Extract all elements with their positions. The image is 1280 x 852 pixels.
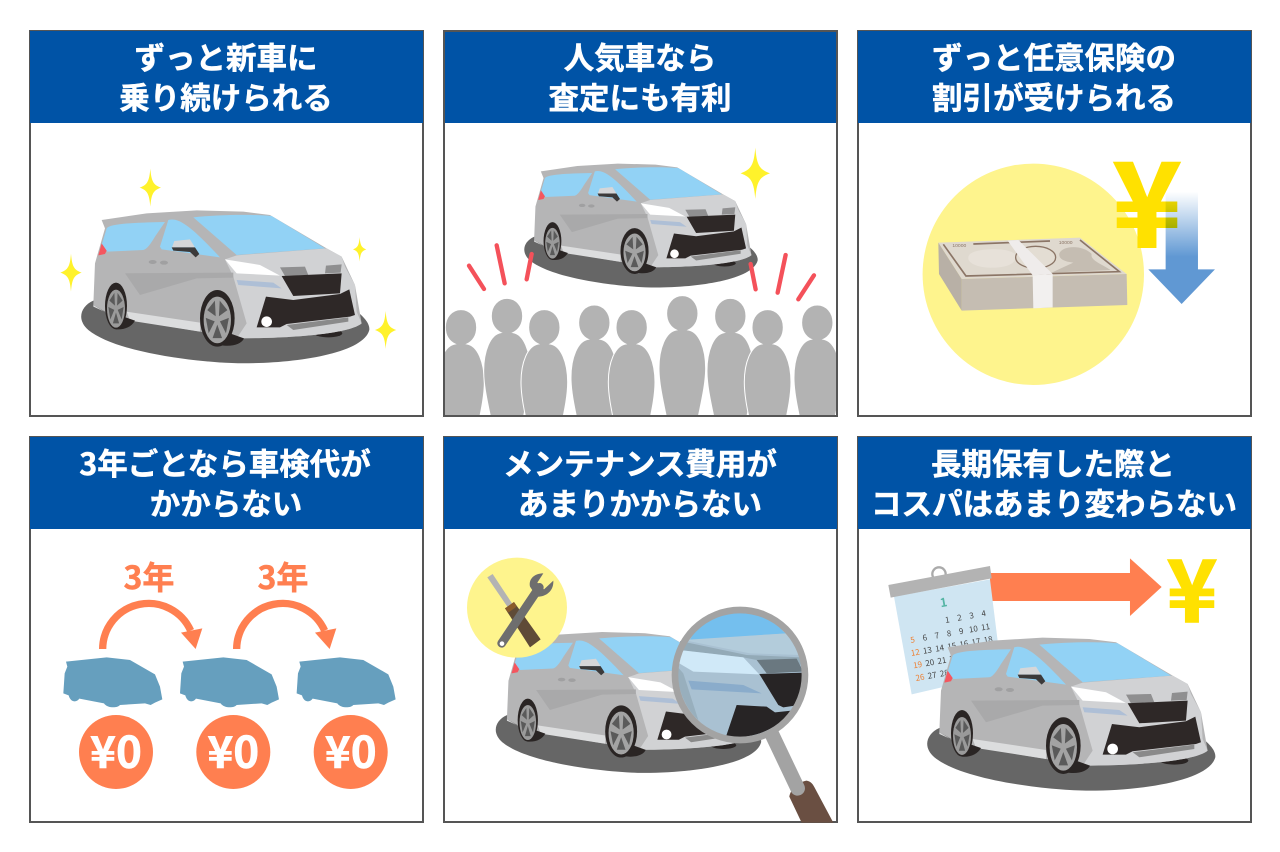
icon: calendar: 15 <box>946 640 957 653</box>
label: 3 years: 3年 <box>124 553 174 599</box>
icon: stack of banknotes <box>938 238 1127 311</box>
icon: calendar <box>888 566 1002 694</box>
badge: zero yen: ¥0 <box>207 717 259 781</box>
panel: insurance discount <box>858 31 1251 416</box>
icon: calendar: 28 <box>939 667 950 680</box>
icon: calendar: 2 <box>956 612 963 624</box>
icon: calendar: 21 <box>937 655 947 667</box>
icon: sparkles <box>60 169 396 349</box>
icon: calendar: 16 <box>959 638 970 650</box>
heading: long-term value: コスパはあまり変わらない <box>871 480 1237 524</box>
arrow: first cycle <box>103 603 202 649</box>
icon: calendar: 19 <box>912 659 923 671</box>
heading: maintenance cost: あまりかからない <box>518 480 762 524</box>
heading: no inspection cost: 3年ごとなら車検代が <box>79 440 371 484</box>
icon: calendar: 27 <box>927 669 938 682</box>
heading: insurance discount: 割引が受けられる <box>932 74 1176 118</box>
heading: insurance discount: ずっと任意保険の <box>932 34 1176 78</box>
panel: popular car <box>438 31 843 436</box>
arrow: falling cost <box>1148 192 1215 304</box>
icon: calendar: 1 <box>944 614 950 626</box>
badge: zero yen: ¥0 <box>325 717 377 781</box>
arrow: second cycle <box>237 603 336 649</box>
icon: calendar: 11 <box>980 621 991 633</box>
icon: calendar: 3 <box>969 610 975 622</box>
illustration: car on display <box>524 164 758 288</box>
background circle <box>923 164 1144 385</box>
icon: calendar: 17 <box>971 636 982 648</box>
icon: calendar: 18 <box>983 634 994 646</box>
arrow: value over time <box>990 558 1162 616</box>
heading: long-term value: 長期保有した際と <box>931 440 1175 484</box>
icon: yen sign: ¥ <box>1167 522 1217 647</box>
icon: calendar: 5 <box>910 634 916 646</box>
panel: new car <box>30 31 423 416</box>
heading: new car: 乗り続けられる <box>119 74 333 118</box>
icon: calendar: 9 <box>958 626 964 637</box>
heading: no inspection cost: かからない <box>150 480 302 524</box>
icon: calendar: 7 <box>934 630 941 642</box>
icon: stack of banknotes: 10000 <box>952 243 966 249</box>
panel: maintenance cost <box>444 437 837 823</box>
badge: zero yen: ¥0 <box>90 717 142 781</box>
heading: popular car: 人気車なら <box>564 34 716 78</box>
label: 3 years: 3年 <box>258 553 308 599</box>
icon: calendar: 10 <box>968 623 979 636</box>
icon: calendar: 14 <box>934 642 946 655</box>
icon: calendar: 1 <box>939 593 949 611</box>
emphasis ticks <box>469 245 814 299</box>
heading: popular car: 査定にも有利 <box>548 74 732 118</box>
crowd of people <box>438 296 841 431</box>
car silhouettes <box>63 657 396 707</box>
panel: long-term value <box>858 437 1251 822</box>
illustration: car <box>927 638 1215 791</box>
icon: stack of banknotes: 10000 <box>1059 240 1073 246</box>
icon: calendar: 22 <box>949 652 960 665</box>
icon: calendar: 8 <box>946 628 953 640</box>
icon: calendar: 26 <box>915 672 926 684</box>
icon: calendar: 20 <box>925 657 936 669</box>
panel: no inspection cost <box>30 437 423 822</box>
badge: zero yen <box>314 715 388 789</box>
icon: calendar: 6 <box>922 632 929 644</box>
icon: calendar: 12 <box>910 647 921 659</box>
heading: maintenance cost: メンテナンス費用が <box>503 440 777 484</box>
illustration: car <box>496 632 761 773</box>
icon: calendar: 4 <box>981 608 987 620</box>
icon: magnifying glass <box>675 610 833 823</box>
badge: zero yen <box>196 715 270 789</box>
icon: yen sign: ¥ <box>1112 111 1182 281</box>
heading: new car: ずっと新車に <box>134 34 318 78</box>
icon: calendar: 13 <box>922 644 933 657</box>
icon: tools <box>467 558 567 658</box>
illustration: shiny car <box>81 210 369 363</box>
badge: zero yen <box>79 715 153 789</box>
icon: sparkle <box>741 148 770 199</box>
